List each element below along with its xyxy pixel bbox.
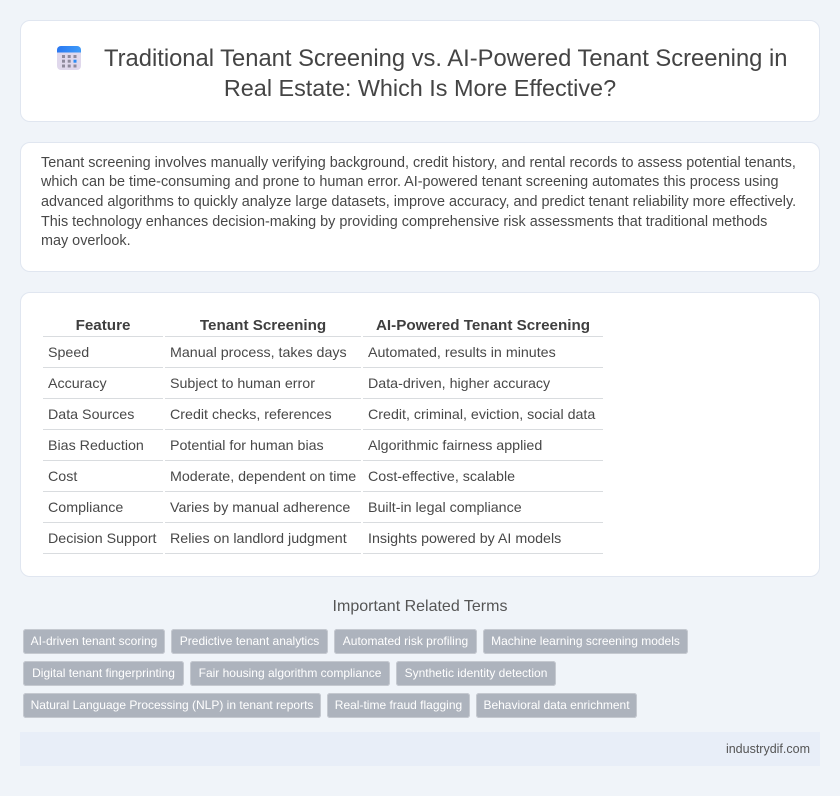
intro paragraph: Tenant screening involves manually verifying background, credit history, and rental records to assess potential tenants, xyxy=(41,154,796,170)
comparison table: Relies on landlord judgment xyxy=(170,531,347,547)
panel: comparison table xyxy=(20,292,820,577)
tag xyxy=(476,693,637,718)
comparison table: Algorithmic fairness applied xyxy=(368,438,542,454)
intro paragraph: may overlook. xyxy=(41,233,131,249)
tag xyxy=(23,693,321,718)
tag xyxy=(23,661,184,686)
intro paragraph: advanced algorithms to quickly analyze large datasets, improve accuracy, and predict tenant reliability more effectively. xyxy=(41,194,796,210)
tag xyxy=(171,629,328,654)
panel: intro text xyxy=(20,142,820,272)
tag xyxy=(190,661,390,686)
comparison table: Credit checks, references xyxy=(170,407,332,423)
footer bar xyxy=(20,732,820,766)
row: bias reduction: Bias Reduction xyxy=(48,438,144,454)
comparison table: Cost-effective, scalable xyxy=(368,469,515,485)
row: accuracy: Accuracy xyxy=(48,376,107,392)
tag xyxy=(483,629,688,654)
header: tenant screening: Tenant Screening xyxy=(200,317,326,334)
tag: Behavioral data enrichment xyxy=(483,698,630,712)
tag: Predictive tenant analytics xyxy=(180,634,319,648)
header: feature: Feature xyxy=(76,317,130,334)
icon: calendar xyxy=(57,46,81,70)
comparison table: Built-in legal compliance xyxy=(368,500,522,516)
tag: Digital tenant fingerprinting xyxy=(32,666,175,680)
comparison table: Varies by manual adherence xyxy=(170,500,350,516)
footer source: industrydif.com xyxy=(726,742,810,756)
tag: Machine learning screening models xyxy=(491,634,680,648)
tag xyxy=(334,629,477,654)
heading: related terms: Important Related Terms xyxy=(333,598,507,615)
row: data sources: Data Sources xyxy=(48,407,134,423)
row: compliance: Compliance xyxy=(48,500,123,516)
tag xyxy=(23,629,165,654)
tag: Real-time fraud flagging xyxy=(335,698,462,712)
row: cost: Cost xyxy=(48,469,77,485)
comparison table: Manual process, takes days xyxy=(170,345,347,361)
comparison table xyxy=(43,317,603,554)
intro paragraph: This technology enhances decision-making by providing comprehensive risk assessments that traditional methods xyxy=(41,214,767,230)
comparison table: Potential for human bias xyxy=(170,438,324,454)
row: speed: Speed xyxy=(48,345,89,361)
tags: related terms xyxy=(23,629,688,718)
title xyxy=(104,45,787,101)
tag: Synthetic identity detection xyxy=(405,666,547,680)
comparison table: Data-driven, higher accuracy xyxy=(368,376,550,392)
title: Real Estate: Which Is More Effective? xyxy=(224,75,616,101)
tag: Automated risk profiling xyxy=(343,634,468,648)
column rules xyxy=(43,336,603,554)
comparison table: Credit, criminal, eviction, social data xyxy=(368,407,595,423)
comparison table: Insights powered by AI models xyxy=(368,531,561,547)
panel: title card xyxy=(20,20,820,122)
header: AI-powered: AI-Powered Tenant Screening xyxy=(376,317,590,334)
title: Traditional Tenant Screening vs. AI-Powered Tenant Screening in xyxy=(104,45,787,72)
tag: Natural Language Processing (NLP) in tenant reports xyxy=(31,698,313,712)
row: decision support: Decision Support xyxy=(48,531,157,547)
comparison table: Subject to human error xyxy=(170,376,315,392)
tag xyxy=(396,661,556,686)
tag: Fair housing algorithm compliance xyxy=(199,666,381,680)
comparison table: Automated, results in minutes xyxy=(368,345,556,361)
intro paragraph xyxy=(41,154,796,249)
comparison table: Moderate, dependent on time xyxy=(170,469,356,485)
intro paragraph: which can be time-consuming and prone to human error. AI-powered tenant screening automates this process using xyxy=(41,174,779,190)
tag xyxy=(327,693,470,718)
tag: AI-driven tenant scoring xyxy=(31,634,157,648)
